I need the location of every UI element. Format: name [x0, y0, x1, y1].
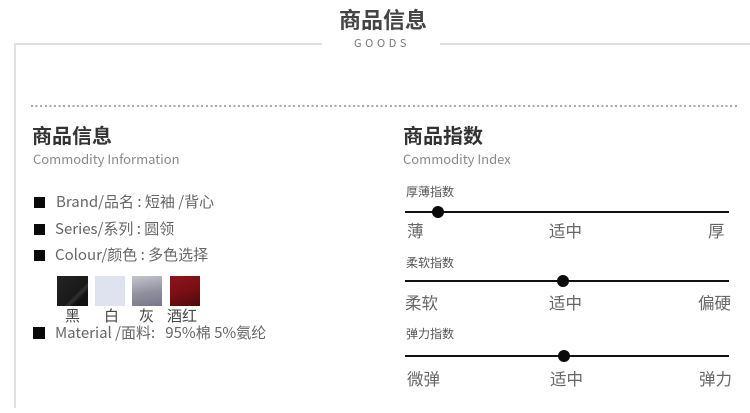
swatch: wine red [170, 276, 200, 306]
value: thin: 薄 [407, 218, 424, 242]
value: slight: 微弹 [407, 366, 440, 390]
bullet: colour [34, 250, 45, 261]
text: series: Series/系列 : 圆领 [55, 218, 174, 239]
frame line: right [440, 43, 750, 45]
text: colour: Colour/颜色 : 多色选择 [55, 244, 208, 265]
swatch: black [57, 276, 88, 306]
slider: thickness [405, 211, 729, 213]
text: brand: Brand/品名 : 短袖 /背心 [56, 191, 214, 212]
knob: elasticity [558, 350, 570, 362]
value: medium: 适中 [549, 218, 582, 242]
bullet: material [33, 327, 45, 339]
label: wine red: 酒红 [167, 305, 197, 326]
value: medium: 适中 [550, 366, 583, 390]
bullet: series [34, 224, 45, 235]
label: grey: 灰 [139, 305, 154, 326]
panel: commodity information [32, 120, 266, 343]
index: thickness [406, 183, 724, 242]
dotted divider [31, 105, 737, 107]
value: soft: 柔软 [405, 290, 438, 314]
heading: commodity index: 商品指数 [403, 120, 483, 149]
subheading: commodity information: Commodity Information [33, 149, 180, 168]
label: black: 黑 [65, 305, 80, 326]
slider: softness [405, 280, 729, 282]
subtitle: GOODS [354, 35, 410, 51]
index: elasticity [406, 325, 732, 390]
knob: softness [557, 275, 569, 287]
label: white: 白 [104, 305, 119, 326]
value: medium: 适中 [549, 290, 582, 314]
title: 商品信息 [339, 3, 427, 35]
label: elasticity: 弹力指数 [406, 325, 454, 342]
frame line: vertical [14, 43, 16, 408]
label: softness: 柔软指数 [406, 254, 454, 271]
panel: commodity index [403, 120, 511, 168]
heading: commodity information: 商品信息 [32, 120, 112, 149]
value: elastic: 弹力 [699, 366, 732, 390]
slider: elasticity [405, 355, 729, 357]
text: material: Material /面料: 95%棉 5%氨纶 [55, 322, 266, 343]
index: softness [405, 254, 731, 314]
swatch: white [95, 276, 125, 306]
bullet: brand [34, 197, 45, 208]
value: thick: 厚 [708, 218, 724, 242]
knob: thickness [432, 206, 444, 218]
frame line: left [14, 43, 322, 45]
value: firm: 偏硬 [698, 290, 731, 314]
subheading: commodity index: Commodity Index [403, 149, 511, 168]
swatch: grey [132, 276, 162, 306]
label: thickness: 厚薄指数 [406, 183, 454, 200]
